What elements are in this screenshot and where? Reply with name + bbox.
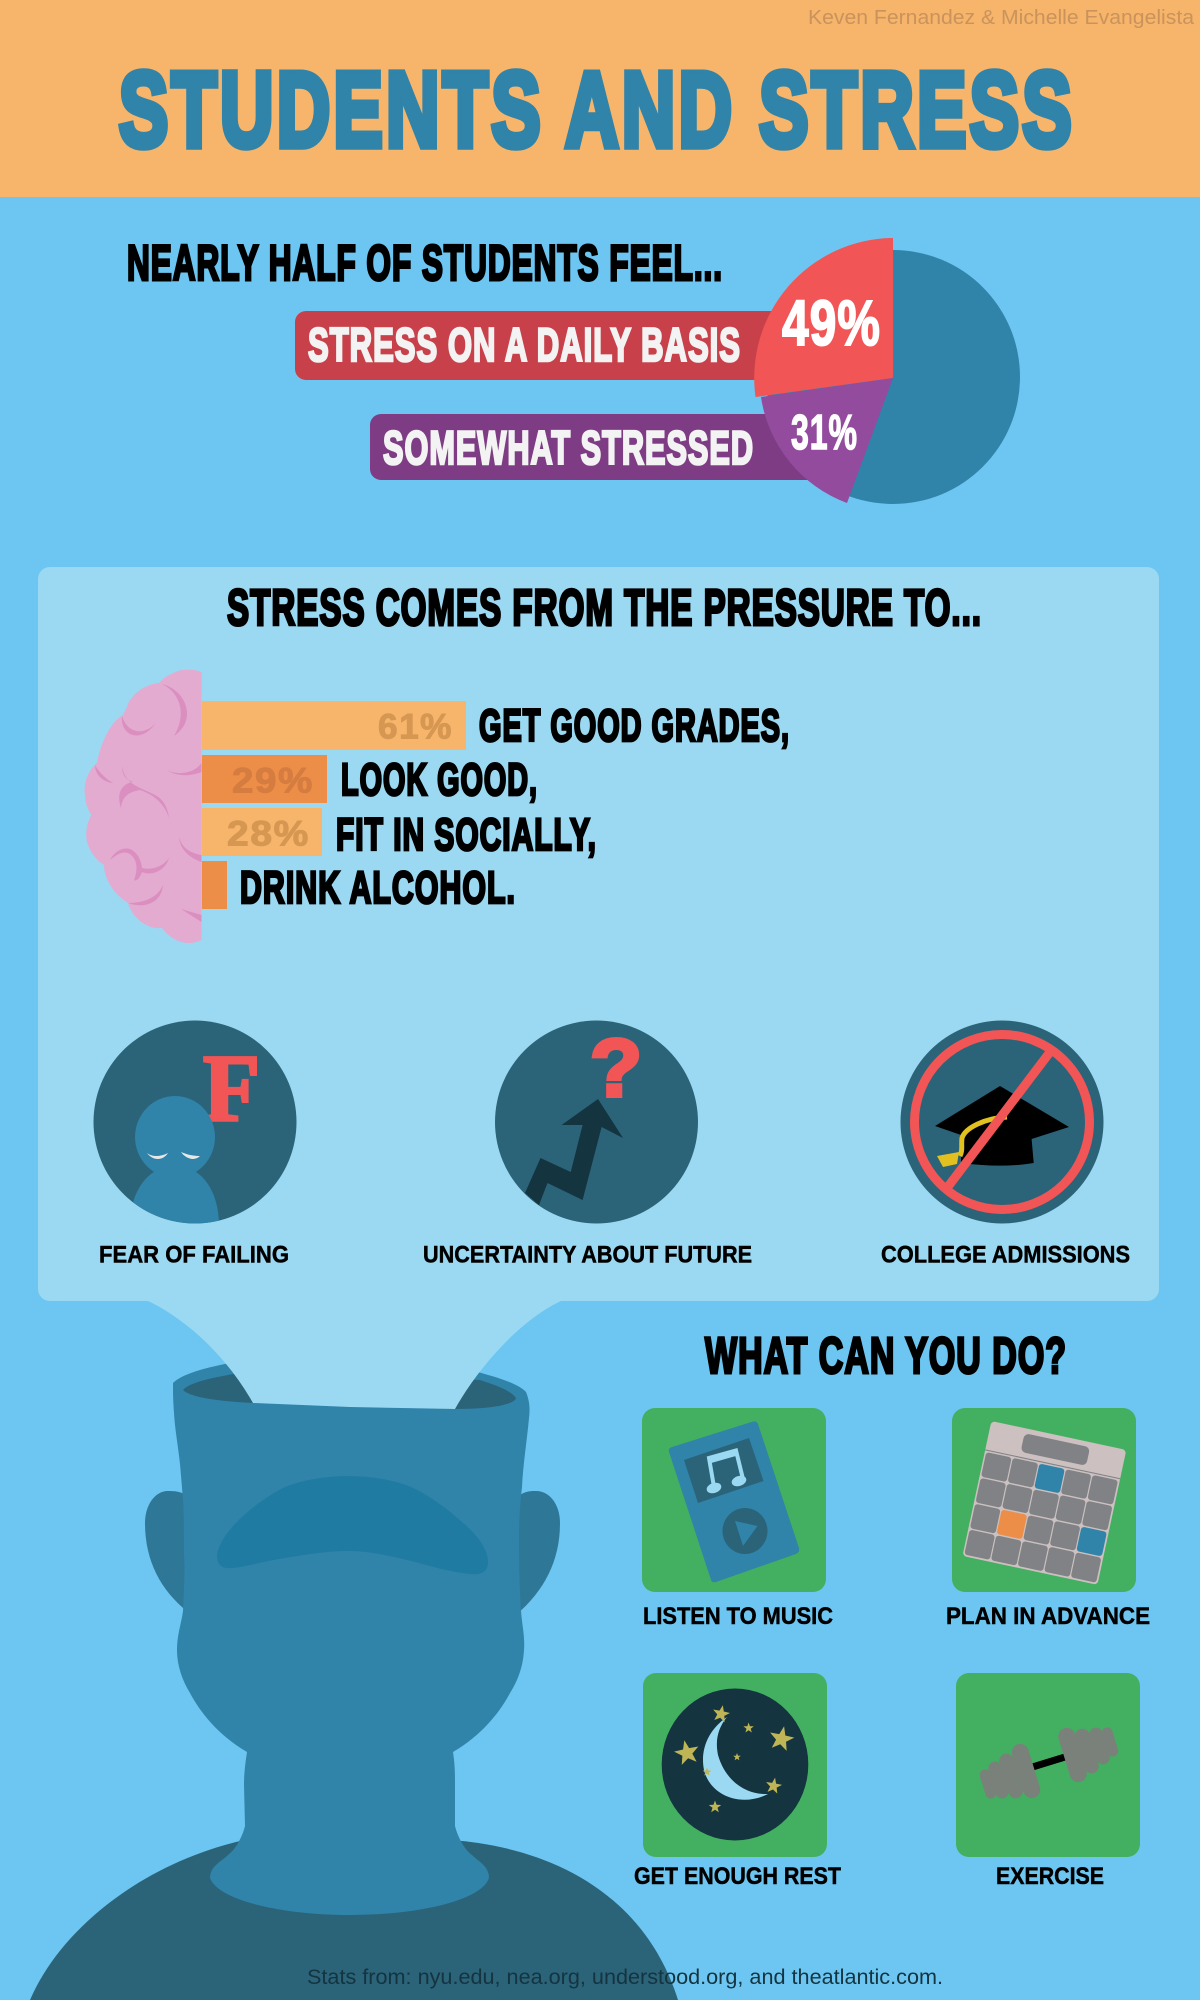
banner: somewhat stressed <box>370 414 820 480</box>
tip: get enough rest <box>634 1673 841 1890</box>
label: uncertainty about future: UNCERTAINTY ABOUT FUTURE <box>423 1242 752 1268</box>
person: open head <box>183 1373 516 1409</box>
tip: listen to music: LISTEN TO MUSIC <box>643 1603 833 1630</box>
bar: drink alcohol <box>202 861 516 913</box>
tip: get enough rest: GET ENOUGH REST <box>634 1863 841 1890</box>
icon: college admissions <box>900 1020 1104 1224</box>
icon: music player <box>669 1421 799 1582</box>
label: college admissions: COLLEGE ADMISSIONS <box>881 1242 1130 1268</box>
slice: 49% <box>754 238 893 397</box>
icon: fear of failing <box>94 1020 296 1230</box>
bar: get good grades: GET GOOD GRADES, <box>479 700 790 751</box>
bar: fit in socially <box>202 808 597 860</box>
icon: moon and stars <box>662 1688 808 1840</box>
banner: stress on a daily basis <box>295 311 785 380</box>
banner: stress on a daily basis: STRESS ON A DAILY BASIS <box>308 318 741 371</box>
bar: drink alcohol: DRINK ALCOHOL. <box>240 862 516 913</box>
tip: exercise <box>956 1673 1140 1890</box>
icon: fear of failing: F <box>203 1035 260 1141</box>
bar: fit in socially: FIT IN SOCIALLY, <box>336 809 597 860</box>
value: 49%: 49% <box>782 287 881 359</box>
tip: plan in advance <box>946 1408 1150 1630</box>
bar: get good grades <box>202 700 790 751</box>
icon: brain <box>85 670 202 943</box>
slice: 31% <box>761 378 893 503</box>
icon: dumbbell <box>978 1726 1120 1800</box>
person: ears <box>145 1491 560 1615</box>
banner: somewhat stressed: SOMEWHAT STRESSED <box>383 421 754 474</box>
tip: listen to music <box>642 1408 833 1630</box>
bar: get good grades: 61% <box>378 708 453 746</box>
pie chart <box>754 238 1020 504</box>
heading: nearly half: NEARLY HALF OF STUDENTS FEEL... <box>127 235 723 291</box>
footer: sources: Stats from: nyu.edu, nea.org, understood.org, and theatlantic.com. <box>307 1966 943 1989</box>
tip: plan in advance: PLAN IN ADVANCE <box>946 1603 1150 1630</box>
bar: look good: LOOK GOOD, <box>341 754 538 805</box>
bar: look good <box>202 754 538 805</box>
bar: fit in socially: 28% <box>227 814 310 854</box>
credit line: Keven Fernandez & Michelle Evangelista <box>808 7 1195 29</box>
person: body <box>30 1840 678 2000</box>
icon: uncertainty about future <box>495 1020 698 1224</box>
person: brow <box>217 1476 488 1574</box>
panel: speech bubble <box>38 567 1159 1409</box>
value: 31%: 31% <box>791 406 858 460</box>
label: fear of failing: FEAR OF FAILING <box>99 1242 289 1268</box>
bar: look good: 29% <box>232 762 314 800</box>
icon: uncertainty about future: ? <box>590 1023 642 1114</box>
tip: exercise: EXERCISE <box>996 1863 1104 1890</box>
person: head and neck <box>173 1364 530 1915</box>
header band <box>0 0 1200 197</box>
icon: calendar <box>962 1421 1126 1585</box>
